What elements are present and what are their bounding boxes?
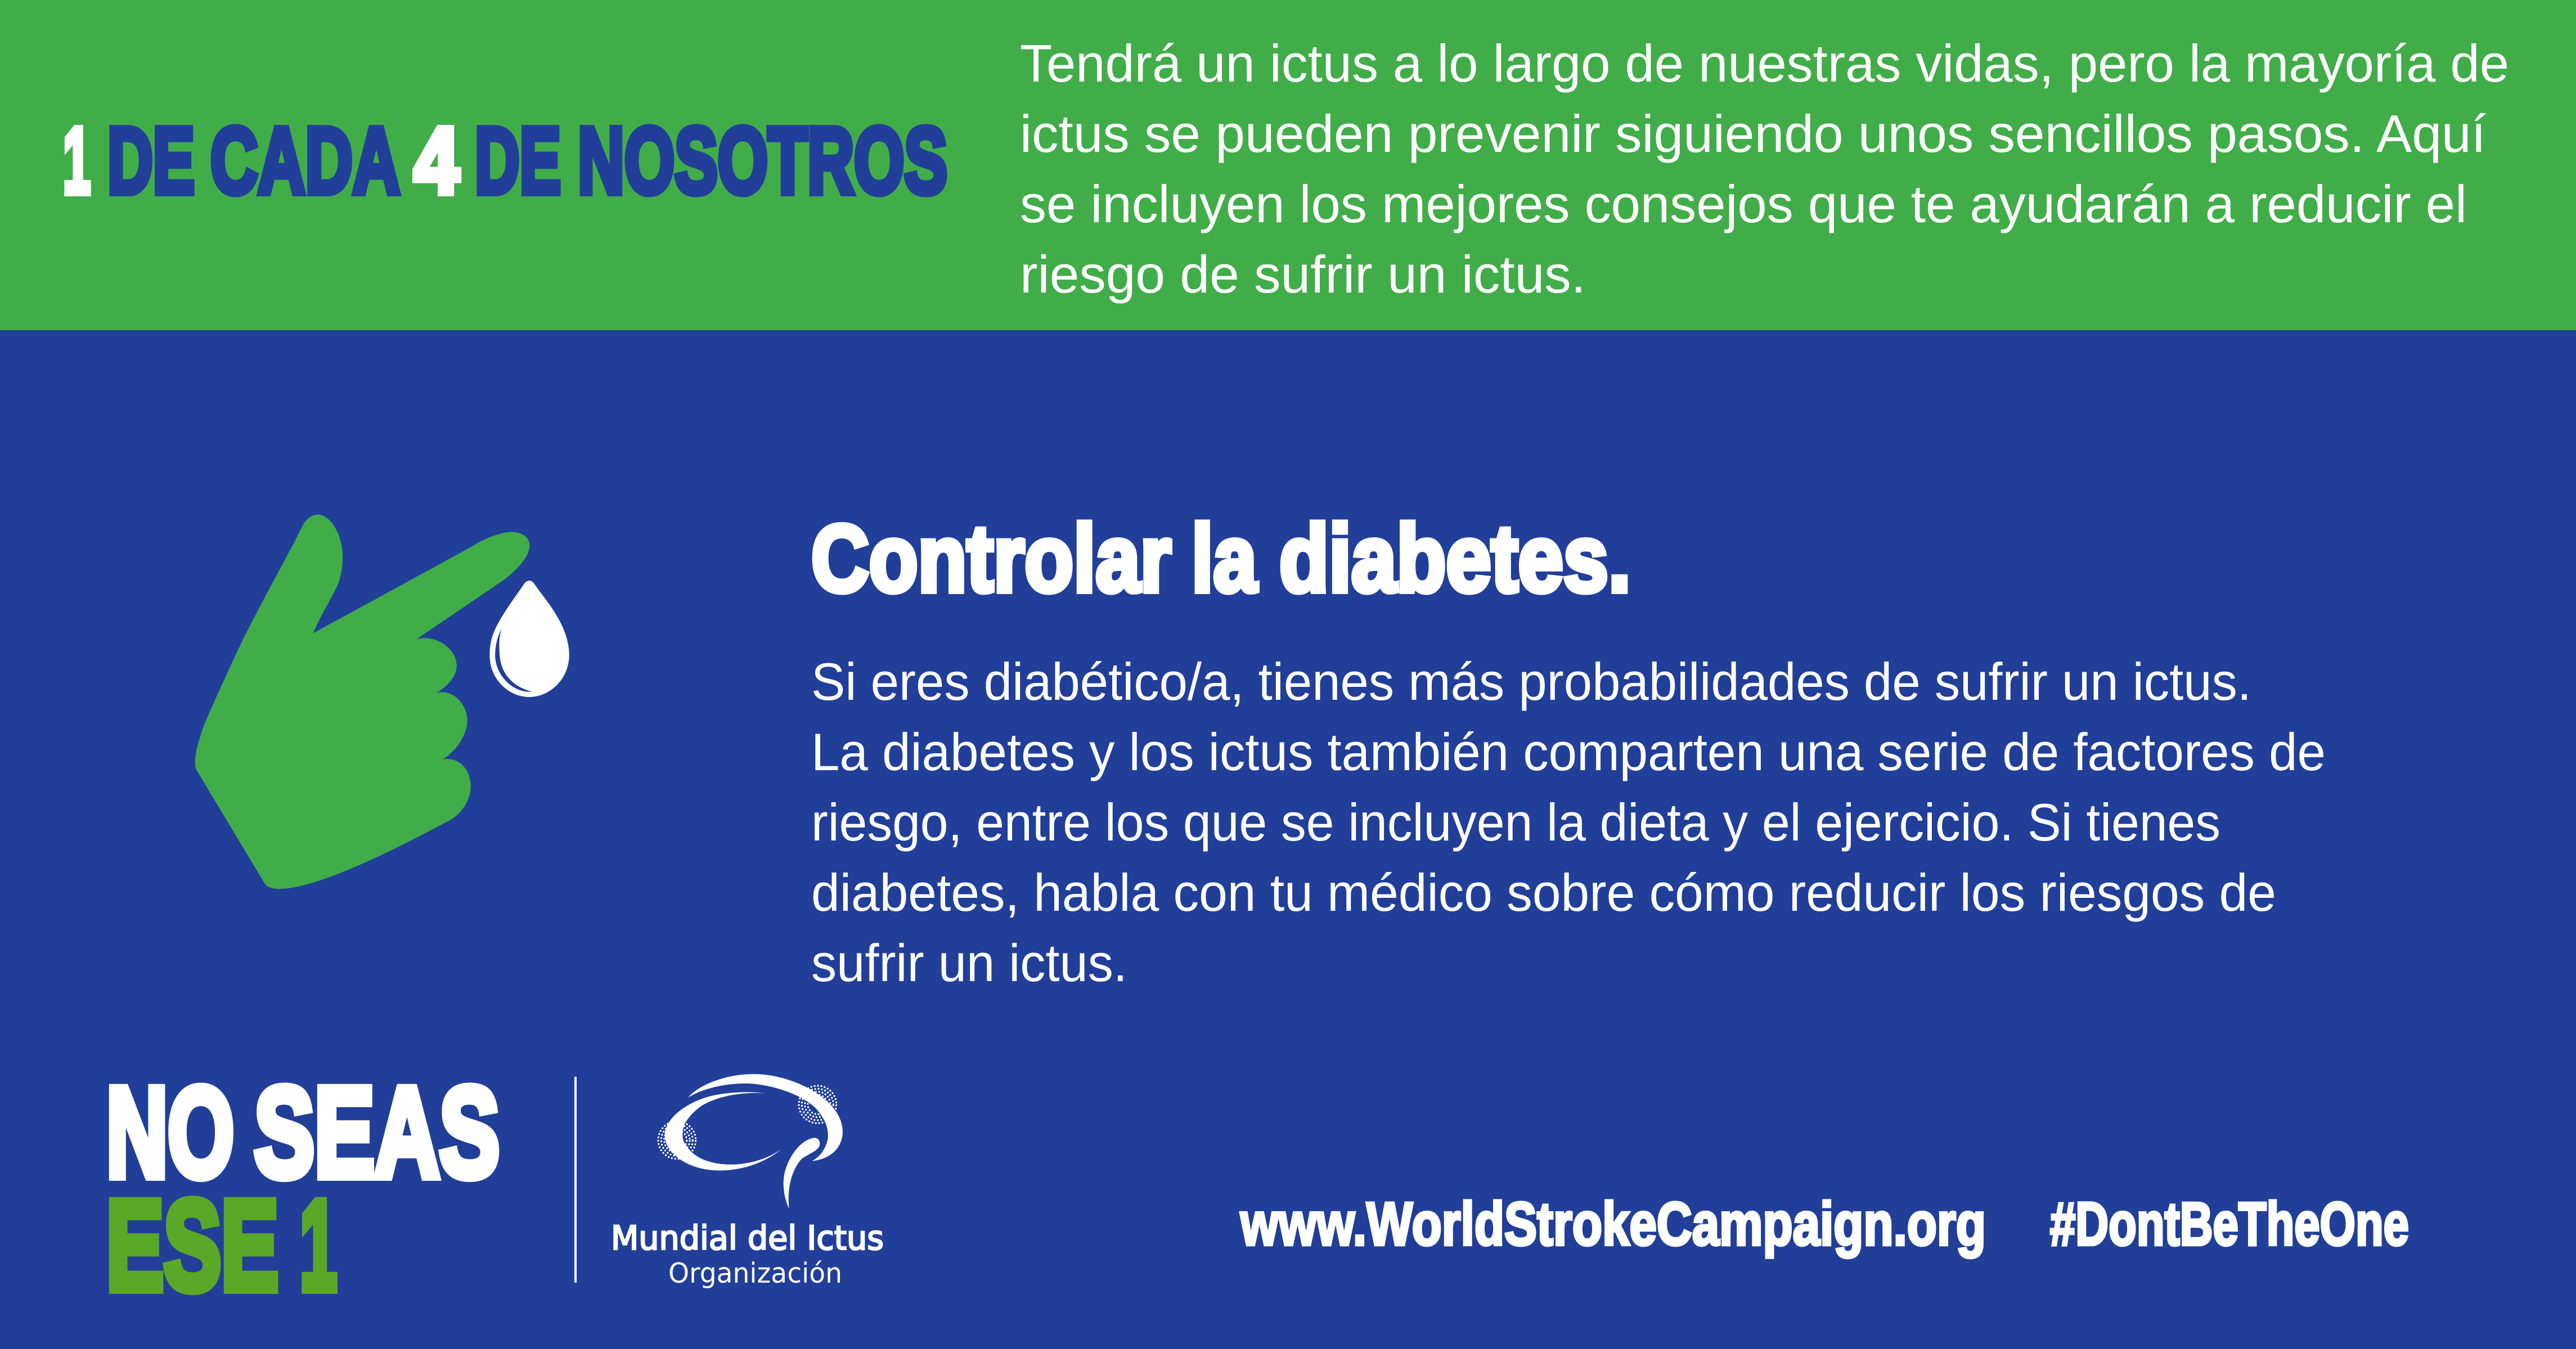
campaign slogan: no seas ese 1 [106,1062,500,1317]
body paragraph: La diabetes y los ictus también comparten una serie de factores de [811,722,2326,781]
heading: controlar la diabetes: la [1192,505,1258,611]
intro paragraph [1020,34,2509,304]
intro paragraph: riesgo de sufrir un ictus. [1020,245,1586,304]
logo text: Mundial del Ictus [611,1218,884,1257]
website url: www.WorldStrokeCampaign.org [1240,1190,1986,1258]
logo text: Organización [668,1257,842,1289]
heading: controlar la diabetes [811,505,1631,611]
logo text [611,1218,884,1289]
headline: 1 de cada 4 de nosotros: DE [475,109,561,213]
headline: 1 de cada 4 de nosotros: 1 [63,109,91,213]
logo: world stroke organization [611,1074,884,1289]
body paragraph: sufrir un ictus. [811,933,1127,992]
body paragraph: diabetes, habla con tu médico sobre cómo reducir los riesgos de [811,863,2276,922]
headline: 1 de cada 4 de nosotros [63,109,947,213]
campaign slogan: no seas ese 1: SEAS [254,1062,500,1204]
campaign slogan: no seas ese 1: ESE [106,1175,278,1317]
headline: 1 de cada 4 de nosotros: NOSOTROS [578,109,947,213]
headline: 1 de cada 4 de nosotros: CADA [210,109,400,213]
hashtag: #DontBeTheOne [2050,1190,2409,1258]
icon: drop [489,581,569,697]
body paragraph: Si eres diabético/a, tienes más probabilidades de sufrir un ictus. [811,652,2251,711]
heading: controlar la diabetes: Controlar [811,505,1171,611]
panel: green header [0,0,2576,330]
headline: 1 de cada 4 de nosotros: 4 [414,109,459,213]
icon: hand [195,515,529,889]
campaign slogan: no seas ese 1: NO [106,1062,234,1204]
heading: controlar la diabetes: diabetes. [1279,505,1631,611]
header bar [0,0,2576,330]
body paragraph [811,652,2326,992]
icon: drop highlight [495,628,532,692]
intro paragraph: ictus se pueden prevenir siguiendo unos sencillos pasos. Aquí [1020,104,2486,163]
intro paragraph: se incluyen los mejores consejos que te ayudarán a reducir el [1020,174,2467,233]
headline: 1 de cada 4 de nosotros: DE [107,109,195,213]
campaign slogan: no seas ese 1: 1 [300,1175,337,1317]
icon: hand pricking finger with blood drop [195,515,569,889]
intro paragraph: Tendrá un ictus a lo largo de nuestras vidas, pero la mayoría de [1020,34,2509,93]
logo mark [658,1074,843,1208]
body paragraph: riesgo, entre los que se incluyen la dieta y el ejercicio. Si tienes [811,793,2220,852]
